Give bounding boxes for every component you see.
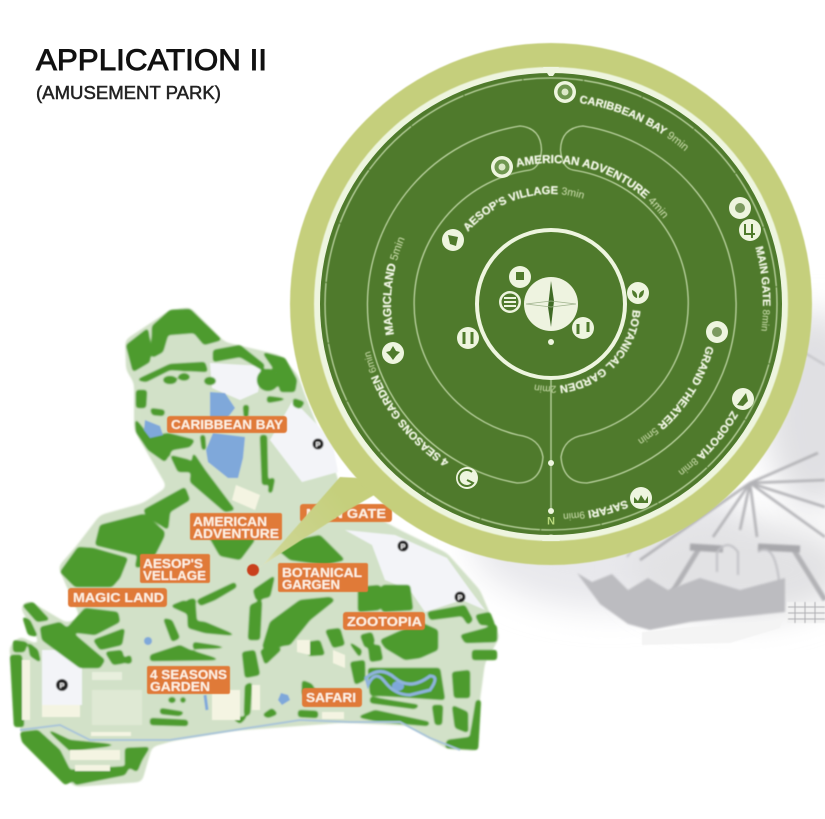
- map label: american adventure: AMERICAN: [193, 514, 267, 529]
- icon: botanical garden: [627, 282, 649, 304]
- label: botanical garden: BOTANICAL GARDEN 2min: [534, 310, 642, 394]
- label: safari: SAFARI 9min: [563, 500, 629, 521]
- map label: caribbean bay: CARIBBEAN BAY: [171, 417, 283, 432]
- map label: botanical gargen: GARGEN: [282, 577, 340, 592]
- map label: 4 seasons garden: GARDEN: [150, 679, 210, 694]
- icon: safari: [630, 487, 652, 509]
- map label: magic land: MAGIC LAND: [73, 590, 164, 605]
- inner ring: [477, 230, 625, 378]
- icon: inner right: [572, 317, 594, 339]
- green forest patches: [10, 309, 497, 785]
- map label: safari: SAFARI: [306, 690, 356, 705]
- map label: main gate: MAIN GATE: [306, 506, 386, 521]
- map label: magic land: [68, 588, 167, 607]
- parking markers: [56, 438, 466, 691]
- icon: inner top: [509, 266, 531, 288]
- title: APPLICATION II: [36, 44, 267, 77]
- map label: main gate: [300, 504, 392, 522]
- icon: grand theater: [706, 321, 728, 343]
- map label: aesop's vellage: AESOP'S: [143, 556, 203, 571]
- map label: botanical gargen: [278, 563, 368, 592]
- map label: botanical gargen: BOTANICAL: [282, 565, 362, 580]
- map label: aesop's vellage: VELLAGE: [143, 568, 206, 583]
- label: grand theater: GRAND THEATER 5min: [638, 346, 714, 444]
- parking and open white areas: [42, 363, 485, 705]
- label: magicland: MAGICLAND 5min: [382, 237, 405, 336]
- map base silhouette: [9, 307, 500, 787]
- park map: P: [60, 683, 65, 690]
- map label: safari: [302, 688, 362, 707]
- location dot: [247, 564, 259, 576]
- park map: P: [316, 442, 321, 449]
- icon: main gate b: [739, 219, 761, 241]
- label: american adventure: AMERICAN ADVENTURE 4min: [516, 154, 668, 219]
- stop labels: [364, 95, 772, 521]
- water bodies: [144, 392, 435, 710]
- park map: P: [458, 595, 463, 602]
- icon: zootopia: [732, 388, 754, 410]
- icon: inner left: [499, 291, 521, 313]
- map labels: [68, 416, 425, 707]
- subtitle: (AMUSEMENT PARK): [36, 83, 221, 103]
- compass: [524, 277, 578, 331]
- river: [20, 720, 460, 750]
- map label: aesop's vellage: [140, 554, 210, 583]
- map label: zootopia: ZOOTOPIA: [347, 614, 423, 629]
- concentric route lines: [325, 78, 777, 530]
- stop icons: [382, 81, 761, 509]
- label: aesop's village: AESOP'S VILLAGE 3min: [464, 185, 584, 232]
- label: main gate: MAIN GATE 8min: [754, 245, 772, 332]
- icon: magicland: [382, 342, 404, 364]
- callout tail and ring: [247, 43, 812, 576]
- park map: [9, 307, 500, 787]
- label: 4 seasons garden: 4 SEASONS GARDEN 6min: [364, 351, 449, 466]
- label: caribbean bay: CARIBBEAN BAY 9min: [579, 95, 688, 152]
- label: zootopia: ZOOPOTIA 8min: [678, 410, 739, 476]
- map label: american adventure: ADVENTURE: [193, 526, 279, 541]
- map label: american adventure: [190, 513, 282, 541]
- park map: P: [401, 544, 406, 551]
- map label: 4 seasons garden: [147, 666, 230, 694]
- ferris wheel photo: [470, 310, 825, 645]
- map label: 4 seasons garden: 4 SEASONS: [150, 667, 227, 682]
- north marker: N: [547, 514, 555, 526]
- route dots: [548, 339, 554, 514]
- time wheel disc: [314, 66, 788, 542]
- pale building blocks: [22, 485, 345, 771]
- icon: aesop's village: [442, 229, 464, 251]
- icon: inner left lower: [457, 327, 479, 349]
- map label: zootopia: [343, 612, 425, 630]
- icon: american adventure: [491, 156, 513, 178]
- notches: [542, 67, 560, 541]
- icon: 4 seasons garden: [456, 467, 478, 489]
- icon: caribbean bay: [554, 81, 576, 103]
- icon: main gate a: [729, 197, 751, 219]
